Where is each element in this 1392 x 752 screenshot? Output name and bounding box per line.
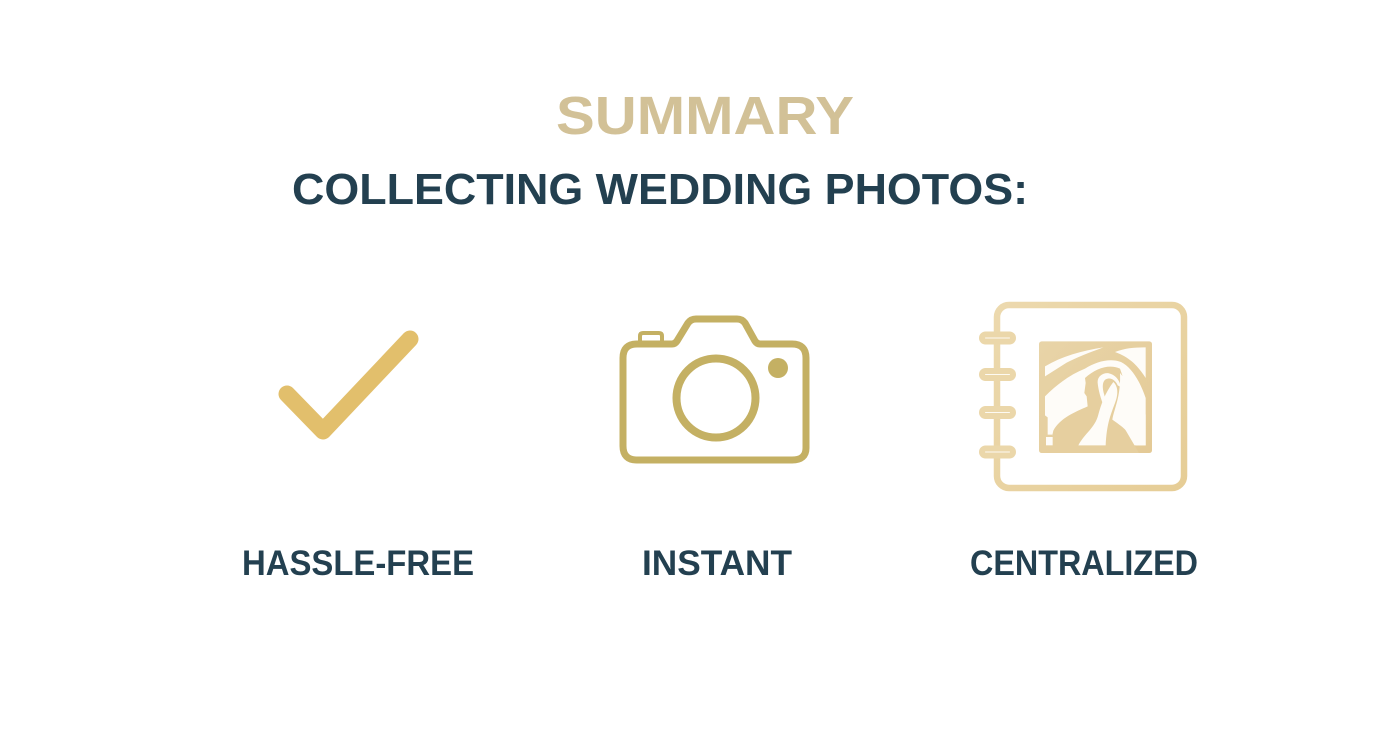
- icon: camera: [623, 319, 806, 460]
- album spiral rings: [982, 334, 1013, 456]
- album photo of couple: [1039, 341, 1152, 453]
- eyebrow heading: SUMMARY: SUMMARY: [556, 86, 854, 146]
- label: HASSLE-FREE: HASSLE-FREE: [242, 544, 474, 583]
- album cover: [997, 305, 1184, 488]
- label: INSTANT: INSTANT: [642, 544, 792, 583]
- icon: check mark: [287, 339, 410, 431]
- title: COLLECTING WEDDING PHOTOS: COLLECTING WEDDING PHOTOS:: [292, 165, 1028, 214]
- icon: photo album: [982, 305, 1184, 488]
- label: CENTRALIZED: CENTRALIZED: [970, 544, 1198, 583]
